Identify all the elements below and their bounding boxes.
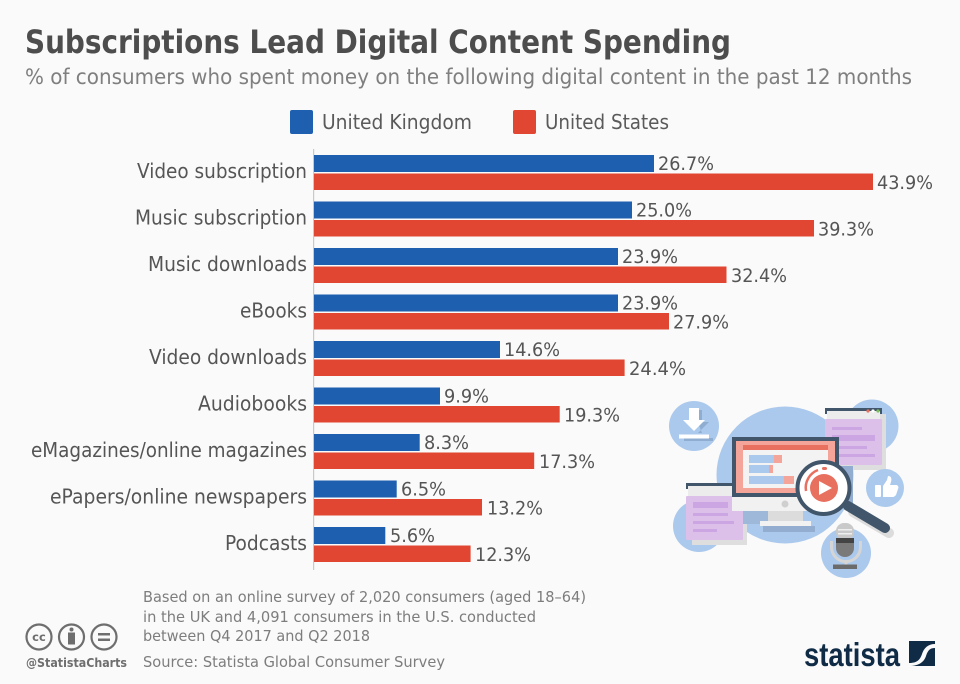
row: Music subscription: 39.3% <box>818 218 874 240</box>
icons: creative commons <box>26 624 116 650</box>
statista logo: statista <box>804 636 901 673</box>
row: Music subscription: 25.0% <box>636 200 692 222</box>
row: Podcasts: 5.6% <box>390 525 435 547</box>
row: Video downloads: 14.6% <box>504 339 560 361</box>
row: eBooks: 27.9% <box>673 312 729 334</box>
row: eBooks: 23.9% <box>622 292 678 314</box>
footnote: between Q4 2017 and Q2 2018 <box>143 627 370 645</box>
row: Music downloads: Music downloads <box>148 252 307 276</box>
row: eMagazines/online magazines: 17.3% <box>539 451 595 473</box>
row: eMagazines/online magazines: 8.3% <box>424 432 469 454</box>
large blue circle <box>716 406 854 544</box>
icon: left document <box>673 483 747 552</box>
row: Audiobooks: 9.9% <box>444 386 489 408</box>
row: ePapers/online newspapers: 13.2% <box>487 498 543 520</box>
row: Music subscription: Music subscription <box>135 206 307 230</box>
icon: download <box>669 401 719 451</box>
row: Video downloads <box>149 339 686 380</box>
legend <box>290 110 669 134</box>
row: Video downloads: Video downloads <box>149 345 307 369</box>
icon: monitor <box>732 437 853 532</box>
row: ePapers/online newspapers: ePapers/online newspapers <box>50 484 307 508</box>
row: Music subscription <box>135 200 874 240</box>
row: Video subscription: Video subscription <box>137 159 307 183</box>
footnote: Based on an online survey of 2,020 consumers (aged 18–64) <box>143 588 586 606</box>
subtitle: % of consumers who spent money on the following digital content in the past 12 months <box>25 65 912 89</box>
icon: microphone <box>821 523 871 578</box>
footnote: in the UK and 4,091 consumers in the U.S. conducted <box>143 608 536 626</box>
row: eMagazines/online magazines: eMagazines/online magazines <box>31 438 307 462</box>
row: Podcasts: Podcasts <box>225 531 307 555</box>
icon: magnifying glass with play button <box>798 462 889 533</box>
bar chart <box>31 149 933 570</box>
title: Subscriptions Lead Digital Content Spending <box>25 23 731 61</box>
row: Audiobooks: Audiobooks <box>198 392 307 416</box>
row: Podcasts <box>225 525 531 566</box>
row: Audiobooks <box>198 386 620 426</box>
row: Video subscription <box>137 153 933 194</box>
footnote <box>143 588 586 645</box>
row: Music downloads: 32.4% <box>731 265 787 287</box>
row: Music downloads <box>148 246 787 287</box>
legend: United States <box>545 110 669 134</box>
row: Video subscription: 26.7% <box>658 153 714 175</box>
row: eBooks <box>240 292 729 334</box>
credit: @StatistaCharts <box>26 655 127 670</box>
row: Video downloads: 24.4% <box>629 358 686 380</box>
icon: thumbs up <box>866 469 904 507</box>
legend: United Kingdom <box>322 110 472 134</box>
row: eMagazines/online magazines <box>31 432 595 473</box>
row: Video subscription: 43.9% <box>877 172 933 194</box>
row: Podcasts: 12.3% <box>475 544 531 566</box>
row: Music downloads: 23.9% <box>622 246 678 268</box>
row: eBooks: eBooks <box>240 298 307 322</box>
row: Audiobooks: 19.3% <box>564 404 620 426</box>
source: Source: Statista Global Consumer Survey <box>143 653 445 671</box>
row: ePapers/online newspapers <box>50 478 543 520</box>
icon: right document <box>825 400 898 470</box>
illustration: digital content <box>669 400 904 578</box>
icons: creative commons: cc <box>32 630 46 644</box>
row: ePapers/online newspapers: 6.5% <box>401 478 446 500</box>
